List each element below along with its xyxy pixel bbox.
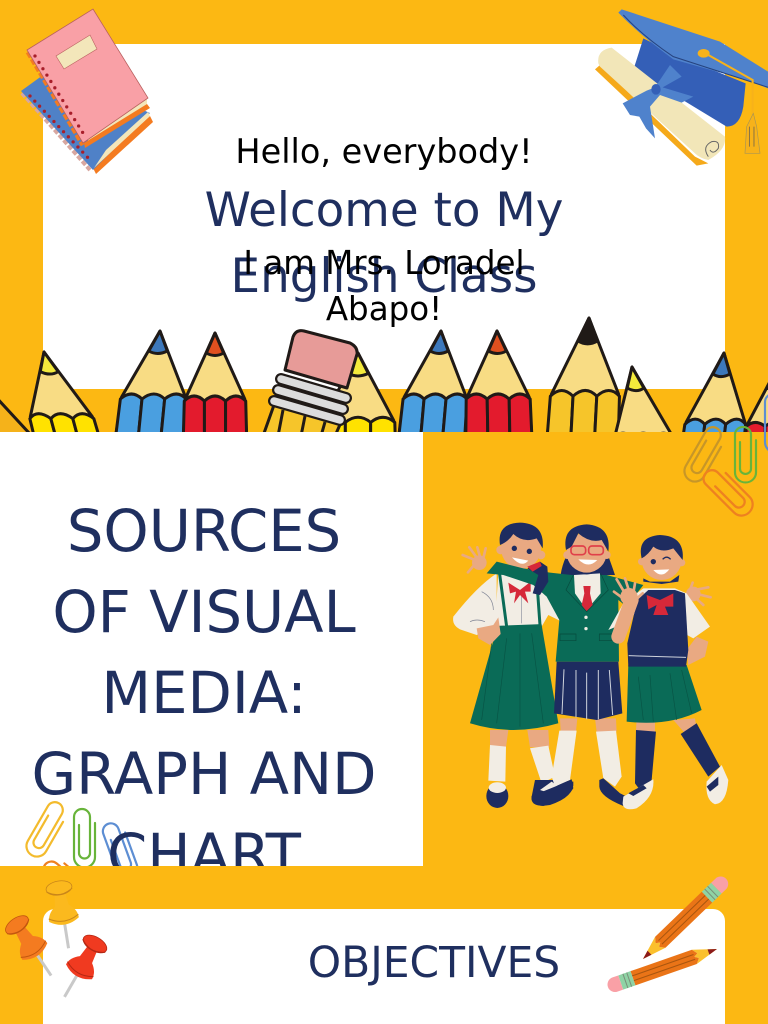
icon: pencils bbox=[605, 873, 731, 994]
paperclips top right bbox=[681, 394, 768, 520]
student: right bbox=[608, 535, 728, 809]
heading: objectives: OBJECTIVES bbox=[308, 938, 560, 987]
slide 2: sources of visual media panel bbox=[0, 394, 768, 908]
heading: sources of visual media: SOURCES bbox=[67, 498, 341, 565]
student: left bbox=[453, 523, 573, 808]
eraser pencil bbox=[263, 331, 357, 436]
greeting text: Hello, everybody! bbox=[235, 132, 533, 171]
slide 1: welcome panel bbox=[0, 0, 768, 477]
slide 3: objectives panel bbox=[0, 866, 768, 1024]
student: middle bbox=[487, 524, 643, 806]
heading: welcome: English Class bbox=[231, 250, 537, 304]
pencil row bbox=[0, 316, 768, 432]
illustration: three students bbox=[453, 523, 728, 809]
heading: welcome: Welcome to My bbox=[205, 184, 563, 238]
teacher name text: I am Mrs. Loradel bbox=[243, 244, 525, 282]
teacher name text: Abapo! bbox=[326, 290, 442, 328]
heading: sources of visual media: MEDIA: bbox=[101, 660, 307, 727]
paperclips bottom left bbox=[23, 799, 140, 908]
heading: sources of visual media: OF VISUAL bbox=[52, 579, 356, 646]
icon: graduation cap and diploma bbox=[595, 9, 768, 166]
heading: sources of visual media: GRAPH AND bbox=[32, 741, 376, 808]
heading: sources of visual media: CHART bbox=[107, 822, 302, 889]
icon: notebooks bbox=[21, 9, 153, 174]
icon: push pins bbox=[1, 879, 111, 1004]
